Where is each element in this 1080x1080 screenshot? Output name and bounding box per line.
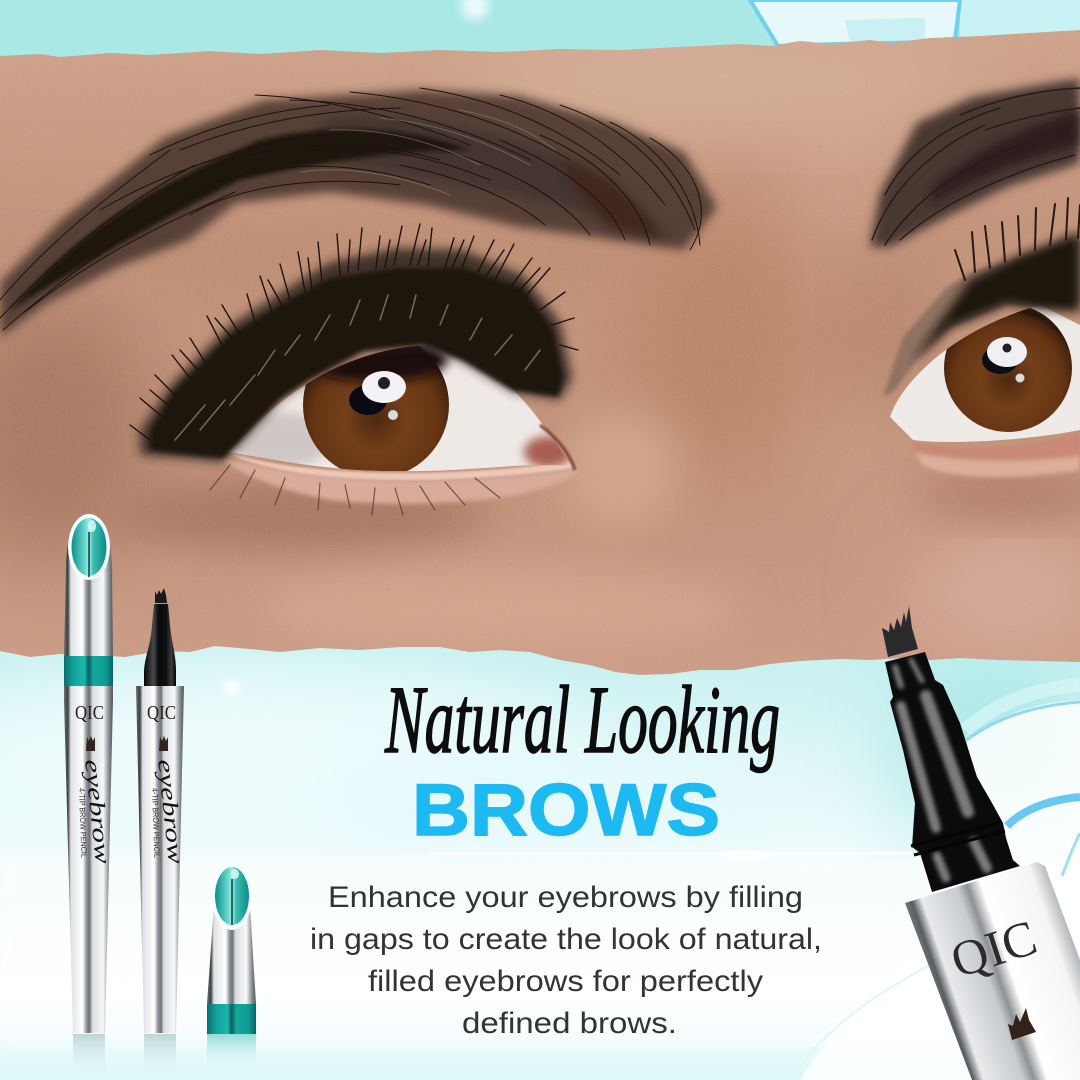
lower lashes: [210, 465, 500, 515]
printed nib icon: [1008, 1008, 1036, 1040]
pen label: QIC: [147, 702, 176, 724]
black tapered neck: [885, 652, 1020, 892]
brand text: QIC: [944, 909, 1043, 988]
pen label: [147, 702, 189, 865]
separate cap: [207, 864, 256, 1066]
skin shading: [0, 45, 1080, 650]
middle pen uncapped: [136, 588, 189, 1074]
sclera: [890, 306, 1080, 442]
description text: defined brows.: [462, 1007, 677, 1040]
four-tip nib: [882, 606, 918, 657]
teal band: [64, 656, 113, 686]
pen label: [75, 702, 116, 865]
sparkle: [224, 680, 771, 860]
left eye: [130, 224, 580, 515]
cap end teal window: [68, 514, 110, 580]
reflection: [207, 1034, 256, 1066]
silver body: [905, 862, 1080, 1080]
pen label: QIC: [75, 702, 104, 724]
neck highlights: [895, 660, 987, 878]
torn photo strip: eyes close-up: [0, 0, 1080, 700]
decorative top-right frame: [461, 0, 1080, 46]
description text: [310, 881, 822, 1040]
pen label: 4-TIP BROW PENCIL: [77, 788, 88, 859]
sclera: [228, 346, 572, 472]
right eye: [880, 198, 1080, 477]
decorative swooshes bottom right: [790, 685, 1080, 1080]
teal band: [207, 1004, 256, 1034]
reflection: [144, 1034, 176, 1074]
description text: in gaps to create the look of natural,: [310, 923, 822, 956]
right eyebrow: [870, 78, 1080, 247]
nib: [155, 588, 167, 603]
pen label: eyebrow: [80, 758, 116, 865]
left eyebrow: [0, 88, 717, 337]
pen label: eyebrow: [153, 758, 189, 865]
iris: [303, 345, 455, 471]
title: Natural Looking: Natural Looking: [384, 666, 780, 773]
upper lashes: [130, 224, 578, 462]
description text: Enhance your eyebrows by filling: [328, 881, 803, 914]
reflection: [73, 1034, 105, 1074]
description text: filled eyebrows for perfectly: [368, 965, 763, 998]
cap end teal window: [212, 864, 252, 930]
pen label: 4-TIP BROW PENCIL: [150, 788, 161, 859]
left pen with cap: [64, 514, 116, 1074]
skin grain: [0, 48, 1080, 666]
upper lashes: [883, 198, 1080, 397]
large brow pen close-up: [882, 606, 1080, 1080]
heading: BROWS: BROWS: [412, 770, 720, 851]
iris: [944, 304, 1072, 432]
